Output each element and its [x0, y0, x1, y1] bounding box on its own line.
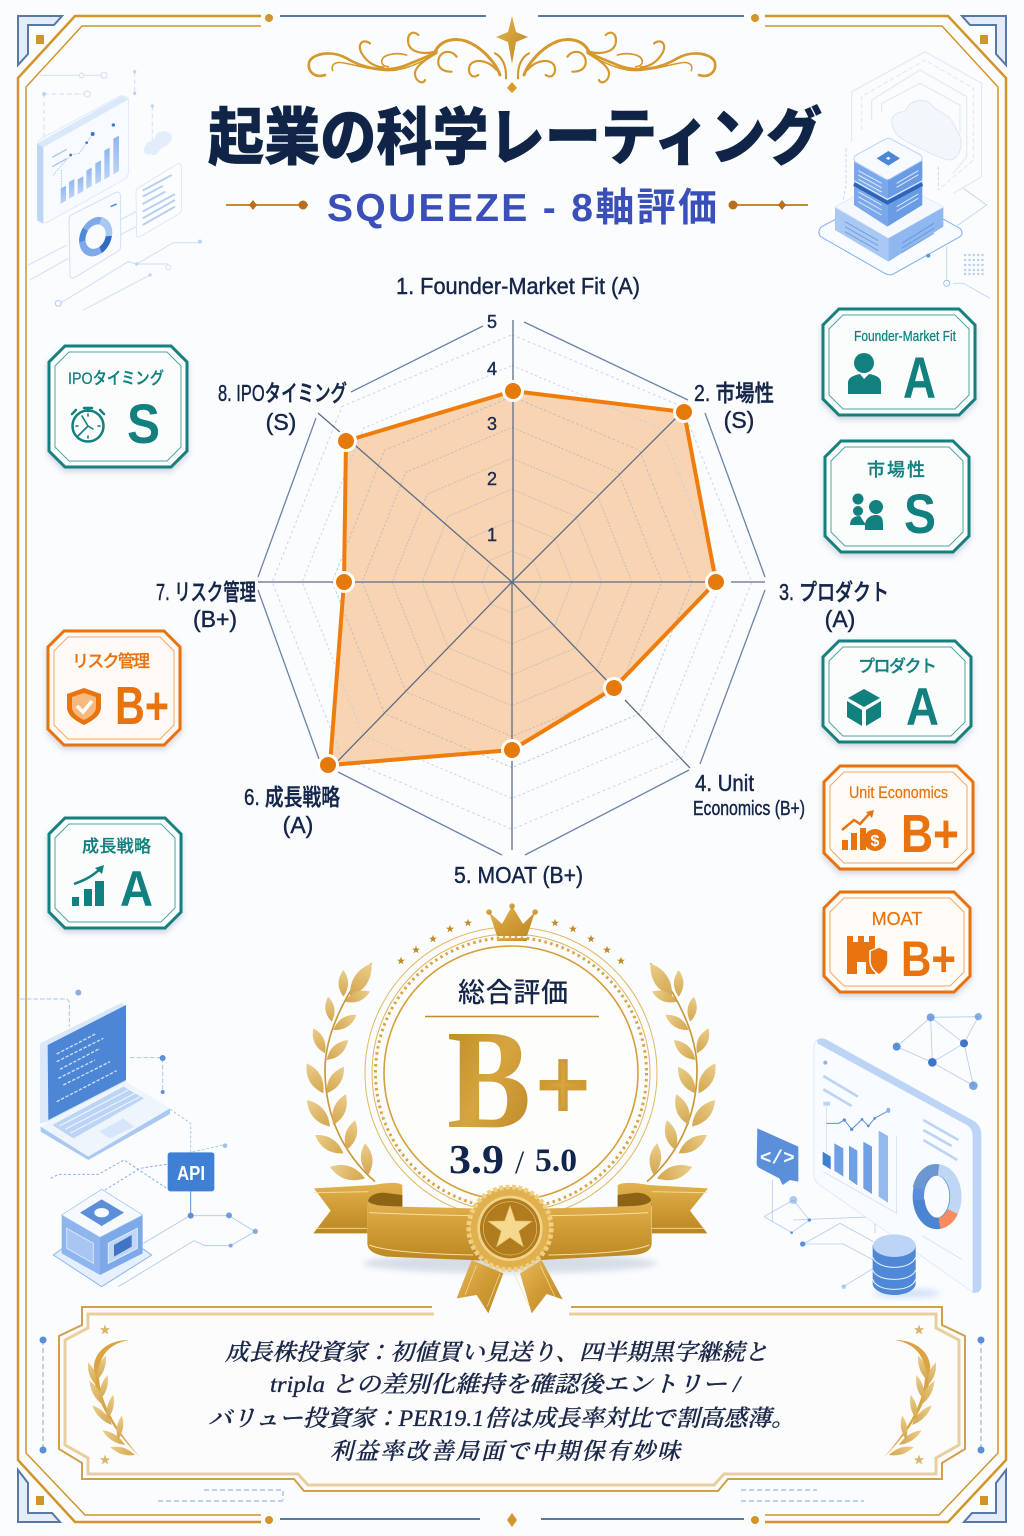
- overall grade seal: [301, 903, 721, 1313]
- panel text: [208, 1340, 795, 1464]
- badge: リスク管理 B+: リスク管理: [72, 652, 150, 671]
- overall grade: +: [536, 1026, 590, 1143]
- axis labels: 7. リスク管理: [156, 579, 256, 605]
- axis labels: Economics (B+): [693, 798, 805, 820]
- panel text: バリュー投資家：PER19.1倍は成長率対比で割高感薄。: [208, 1406, 795, 1431]
- badge: プロダクト A: [823, 641, 971, 742]
- icon: product cube: [847, 689, 881, 726]
- illustration: laptop and API bottom left: API: [177, 1162, 205, 1185]
- badge: プロダクト A: A: [906, 678, 939, 737]
- panel text: 成長株投資家：初値買い見送り、四半期黒字継続と: [225, 1340, 768, 1365]
- overall score: 3.9: [449, 1136, 504, 1182]
- database: [873, 1234, 940, 1298]
- panel text: 利益率改善局面で中期保有妙味: [330, 1439, 682, 1464]
- badge: Founder-Market Fit A: Founder-Market Fit: [854, 328, 957, 345]
- axis labels: (A): [283, 812, 313, 838]
- overall score: [449, 1136, 577, 1182]
- badge: IPOタイミング S: S: [127, 392, 160, 455]
- radar: scale numbers: 1: [487, 525, 497, 545]
- axis labels: 2. 市場性: [694, 380, 774, 406]
- illustration: analytics dashboard bottom right: </>: [760, 1147, 795, 1169]
- donut: [918, 1170, 956, 1224]
- icon: castle with shield: [847, 936, 888, 975]
- crown: [486, 903, 538, 941]
- illustration: laptop and API bottom left: [20, 990, 258, 1287]
- radar: scale numbers: 2: [487, 469, 497, 489]
- badge: Founder-Market Fit A: [823, 309, 975, 415]
- radar: scale numbers: 5: [487, 312, 497, 332]
- badge: IPOタイミング S: IPOタイミング: [68, 369, 164, 388]
- icon: coin and growth bars: $: [871, 833, 880, 850]
- badge: Unit Economics B+: B+: [901, 804, 959, 864]
- icon: coin and growth bars: [842, 810, 886, 851]
- subtitle: [226, 187, 808, 230]
- badge: 市場性 S: [825, 441, 969, 552]
- badge: 市場性 S: 市場性: [867, 460, 927, 480]
- subtitle: SQUEEZE - 8軸評価: [327, 187, 717, 230]
- badge: Unit Economics B+: [824, 766, 973, 869]
- overall score: /: [515, 1145, 525, 1181]
- axis labels: 6. 成長戦略: [244, 784, 340, 810]
- badge: Unit Economics B+: Unit Economics: [849, 783, 948, 802]
- radar: scale numbers: 4: [487, 359, 497, 379]
- illustration: analytics dashboard top left: [28, 70, 202, 310]
- badge: リスク管理 B+: B+: [115, 676, 169, 736]
- API tag: [168, 1152, 214, 1191]
- axis labels: 1. Founder-Market Fit (A): [396, 273, 640, 299]
- badge: プロダクト A: プロダクト: [858, 656, 937, 676]
- main title: 起業の科学レーティング: [208, 103, 822, 173]
- bottom recommendation panel: [59, 1307, 965, 1491]
- axis labels: (A): [825, 606, 855, 632]
- gold ribbon and rosette: [313, 1183, 708, 1313]
- axis labels: (S): [724, 407, 754, 433]
- axis labels: 4. Unit: [695, 770, 755, 796]
- overall score: 5.0: [535, 1143, 577, 1179]
- badge: 成長戦略 A: 成長戦略: [82, 837, 151, 856]
- radar chart: [258, 312, 765, 855]
- radar: score area: [330, 391, 716, 765]
- panel laurel left: [85, 1324, 140, 1464]
- icon: market people: [850, 494, 883, 530]
- badge: MOAT B+: B+: [901, 931, 956, 987]
- radar: score line: [330, 391, 716, 765]
- radar: score points: [318, 382, 726, 774]
- overall grade: B: [447, 1000, 531, 1158]
- badge: MOAT B+: [824, 892, 970, 992]
- overall grade: [447, 1000, 590, 1158]
- badge: 成長戦略 A: A: [120, 861, 153, 917]
- badge: MOAT B+: MOAT: [872, 909, 922, 929]
- axis labels: [156, 273, 889, 888]
- panel text: tripla との差別化維持を確認後エントリー /: [270, 1372, 743, 1397]
- illustration: cloud server top right: [819, 52, 990, 298]
- code bubble: [757, 1128, 798, 1185]
- icon: growth chart: [72, 865, 104, 906]
- illustration: analytics dashboard bottom right: [757, 1013, 982, 1298]
- axis labels: 5. MOAT (B+): [454, 862, 583, 888]
- badge: IPOタイミング S: [49, 346, 187, 467]
- seal rings: [365, 927, 657, 1219]
- badge: Founder-Market Fit A: A: [903, 346, 936, 411]
- dashed accents bottom: [40, 1336, 984, 1501]
- seal stars: [397, 919, 625, 964]
- panel laurel right: [884, 1324, 939, 1464]
- top gold ornament: [309, 16, 715, 93]
- radar: scale numbers: [487, 312, 497, 545]
- icon: founder person: [848, 353, 881, 394]
- axis labels: 3. プロダクト: [779, 579, 889, 605]
- radar: scale numbers: 3: [487, 414, 497, 434]
- seal laurel right: [644, 960, 721, 1185]
- badge: 市場性 S: S: [904, 482, 936, 545]
- icon: risk shield: [67, 688, 101, 725]
- seal laurel left: [301, 960, 378, 1185]
- badge: リスク管理 B+: [48, 631, 180, 745]
- axis labels: 8. IPOタイミング: [218, 380, 347, 406]
- seal heading: 総合評価: [458, 978, 568, 1008]
- axis labels: (B+): [193, 606, 237, 632]
- icon: stopwatch: [72, 408, 104, 442]
- axis labels: (S): [266, 409, 296, 435]
- badge: 成長戦略 A: [49, 818, 181, 928]
